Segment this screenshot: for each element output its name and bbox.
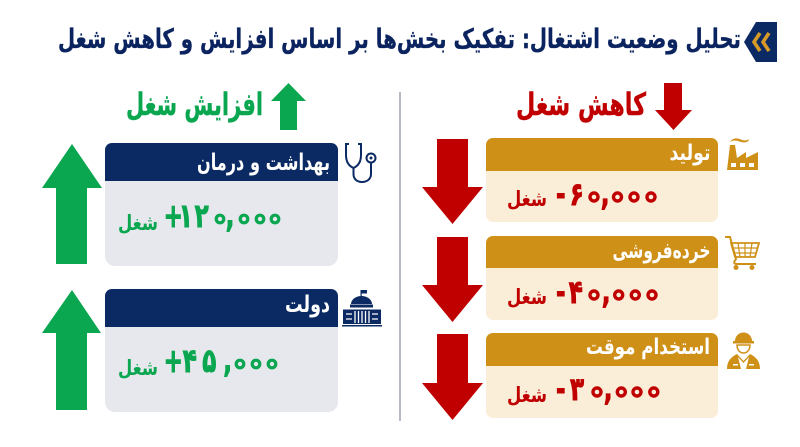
card: health care: +۱۲۰,۰۰۰	[164, 197, 281, 235]
card: retail	[486, 236, 718, 320]
heading: job decrease: کاهش شغل	[516, 87, 647, 123]
card: retail: شغل	[507, 285, 547, 309]
card: government: شغل	[118, 356, 158, 380]
card: temporary employment: -۳۰,۰۰۰	[556, 370, 660, 408]
card: government: +۴۵,۰۰۰	[164, 342, 278, 380]
arrow: health care up	[42, 144, 102, 264]
panel: job gains	[42, 83, 382, 412]
arrow: temporary employment down	[422, 334, 483, 420]
icon: government building	[342, 290, 382, 326]
card: temporary employment: استخدام موقت	[586, 335, 710, 360]
arrow: government up	[42, 290, 101, 410]
card: temporary employment: شغل	[507, 383, 547, 407]
arrow: retail down	[422, 237, 483, 322]
arrow: manufacturing down	[422, 139, 483, 224]
icon: construction worker	[727, 333, 760, 369]
card: retail: -۴۰,۰۰۰	[556, 273, 658, 311]
title badge with chevrons	[744, 22, 777, 62]
card: government: دولت	[285, 292, 330, 318]
card: manufacturing: شغل	[507, 187, 547, 211]
card: temporary employment	[486, 333, 718, 418]
card: health care: شغل	[118, 211, 158, 235]
icon: shopping cart	[725, 237, 759, 270]
card: retail: خرده‌فروشی	[612, 239, 710, 264]
heading arrow: down	[655, 83, 692, 130]
icon: factory	[727, 138, 758, 170]
card: government	[105, 289, 338, 412]
panel: job losses	[422, 83, 760, 420]
card: manufacturing: -۶۰,۰۰۰	[556, 175, 657, 213]
card: health care: بهداشت و درمان	[197, 150, 330, 176]
heading arrow: up	[271, 83, 306, 130]
heading: job increase: افزایش شغل	[126, 87, 263, 123]
card: manufacturing	[486, 138, 718, 222]
card: manufacturing: تولید	[670, 141, 710, 166]
icon: stethoscope	[346, 144, 376, 182]
card: health care	[105, 143, 338, 266]
